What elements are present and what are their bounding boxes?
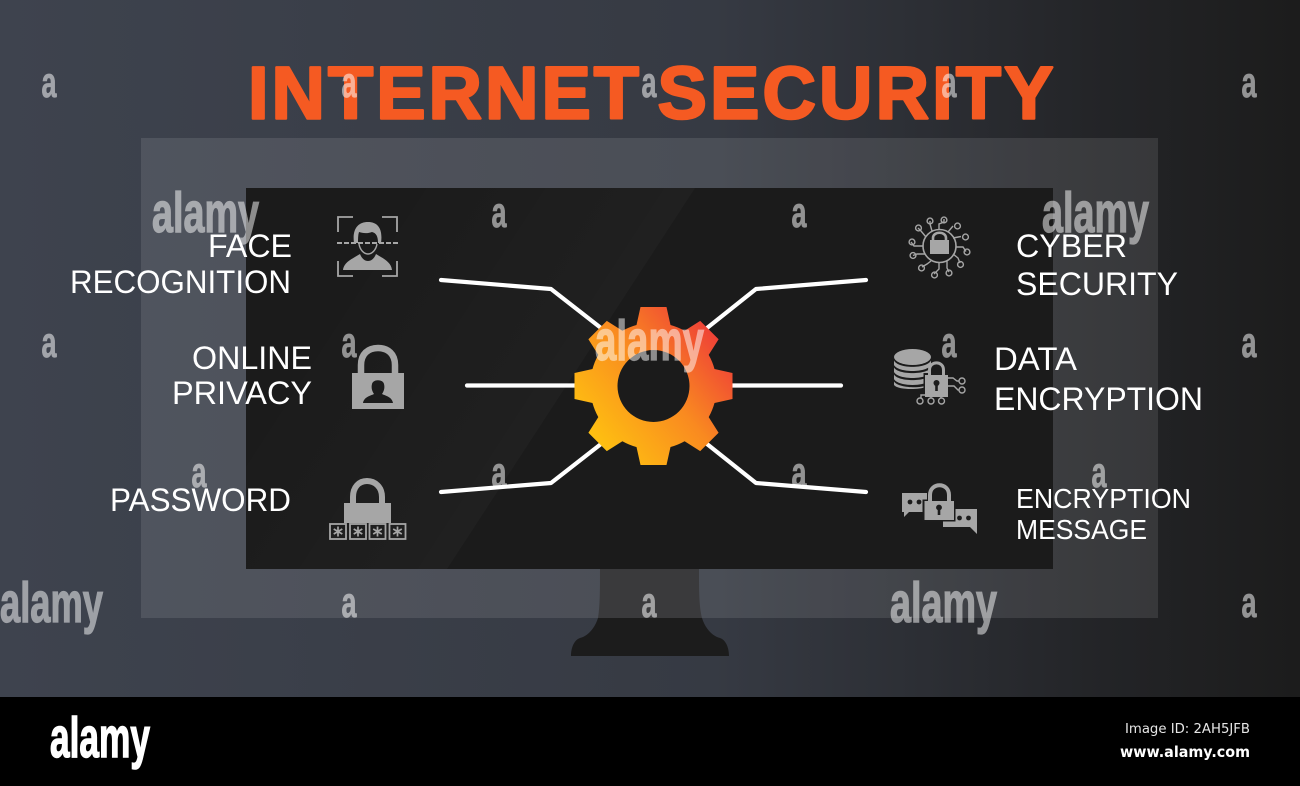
label: encryption message: ENCRYPTION	[1016, 483, 1191, 514]
watermarks: a	[1242, 579, 1257, 627]
title	[248, 52, 1054, 134]
label: face recognition: RECOGNITION	[70, 264, 291, 300]
label: encryption message	[1016, 483, 1191, 545]
watermarks: a	[192, 449, 207, 497]
connector lines	[441, 280, 866, 492]
watermarks: a	[942, 59, 957, 107]
footer logo: alamy	[50, 706, 150, 770]
watermarks: a	[342, 579, 357, 627]
icon: data encryption	[894, 349, 965, 404]
monitor stand neck	[598, 569, 702, 618]
label: online privacy: PRIVACY	[172, 375, 312, 411]
watermarks: a	[342, 59, 357, 107]
watermarks: alamy	[595, 309, 704, 373]
watermarks: alamy	[152, 181, 259, 245]
watermarks: alamy	[890, 571, 997, 635]
label: online privacy	[172, 340, 312, 411]
label: cyber security: CYBER	[1016, 228, 1127, 264]
icon: face recognition	[337, 217, 398, 276]
watermarks: a	[42, 59, 57, 107]
label: encryption message: MESSAGE	[1016, 514, 1147, 545]
title: SECURITY	[658, 52, 1054, 134]
monitor	[141, 138, 1158, 656]
watermarks: a	[1242, 59, 1257, 107]
label: face recognition	[70, 228, 292, 300]
label: data encryption	[994, 341, 1203, 417]
label: data encryption: ENCRYPTION	[994, 381, 1203, 417]
watermarks: a	[642, 579, 657, 627]
footer band	[0, 697, 1300, 786]
watermarks: a	[792, 449, 807, 497]
label: face recognition: FACE	[208, 228, 292, 264]
label: password: PASSWORD	[110, 482, 291, 518]
watermarks: alamy	[1042, 181, 1149, 245]
watermarks	[0, 59, 1257, 635]
icon: encryption message	[902, 485, 977, 534]
monitor frame	[141, 138, 1158, 618]
icon: cyber security	[909, 217, 970, 278]
icon: central gear	[574, 307, 732, 465]
watermarks: a	[942, 319, 957, 367]
footer image id and site: Image ID: 2AH5JFB	[1125, 722, 1250, 737]
icon: online privacy lock	[352, 348, 404, 409]
watermarks: a	[642, 59, 657, 107]
watermarks: a	[1092, 449, 1107, 497]
monitor stand base	[571, 618, 729, 656]
watermarks: alamy	[0, 571, 103, 635]
label: cyber security	[1016, 228, 1178, 302]
watermarks: a	[792, 189, 807, 237]
watermarks: a	[1242, 319, 1257, 367]
footer image id and site: www.alamy.com	[1120, 743, 1250, 761]
watermarks: a	[492, 189, 507, 237]
title: INTERNET	[248, 52, 639, 134]
label: data encryption: DATA	[994, 341, 1078, 377]
footer image id and site	[1120, 722, 1250, 761]
icon: password lock	[330, 481, 406, 539]
label: cyber security: SECURITY	[1016, 266, 1178, 302]
monitor screen	[246, 188, 1053, 569]
watermarks: a	[342, 319, 357, 367]
watermarks: a	[42, 319, 57, 367]
watermarks: a	[492, 449, 507, 497]
label: online privacy: ONLINE	[192, 340, 312, 376]
screen reflection	[246, 188, 695, 569]
